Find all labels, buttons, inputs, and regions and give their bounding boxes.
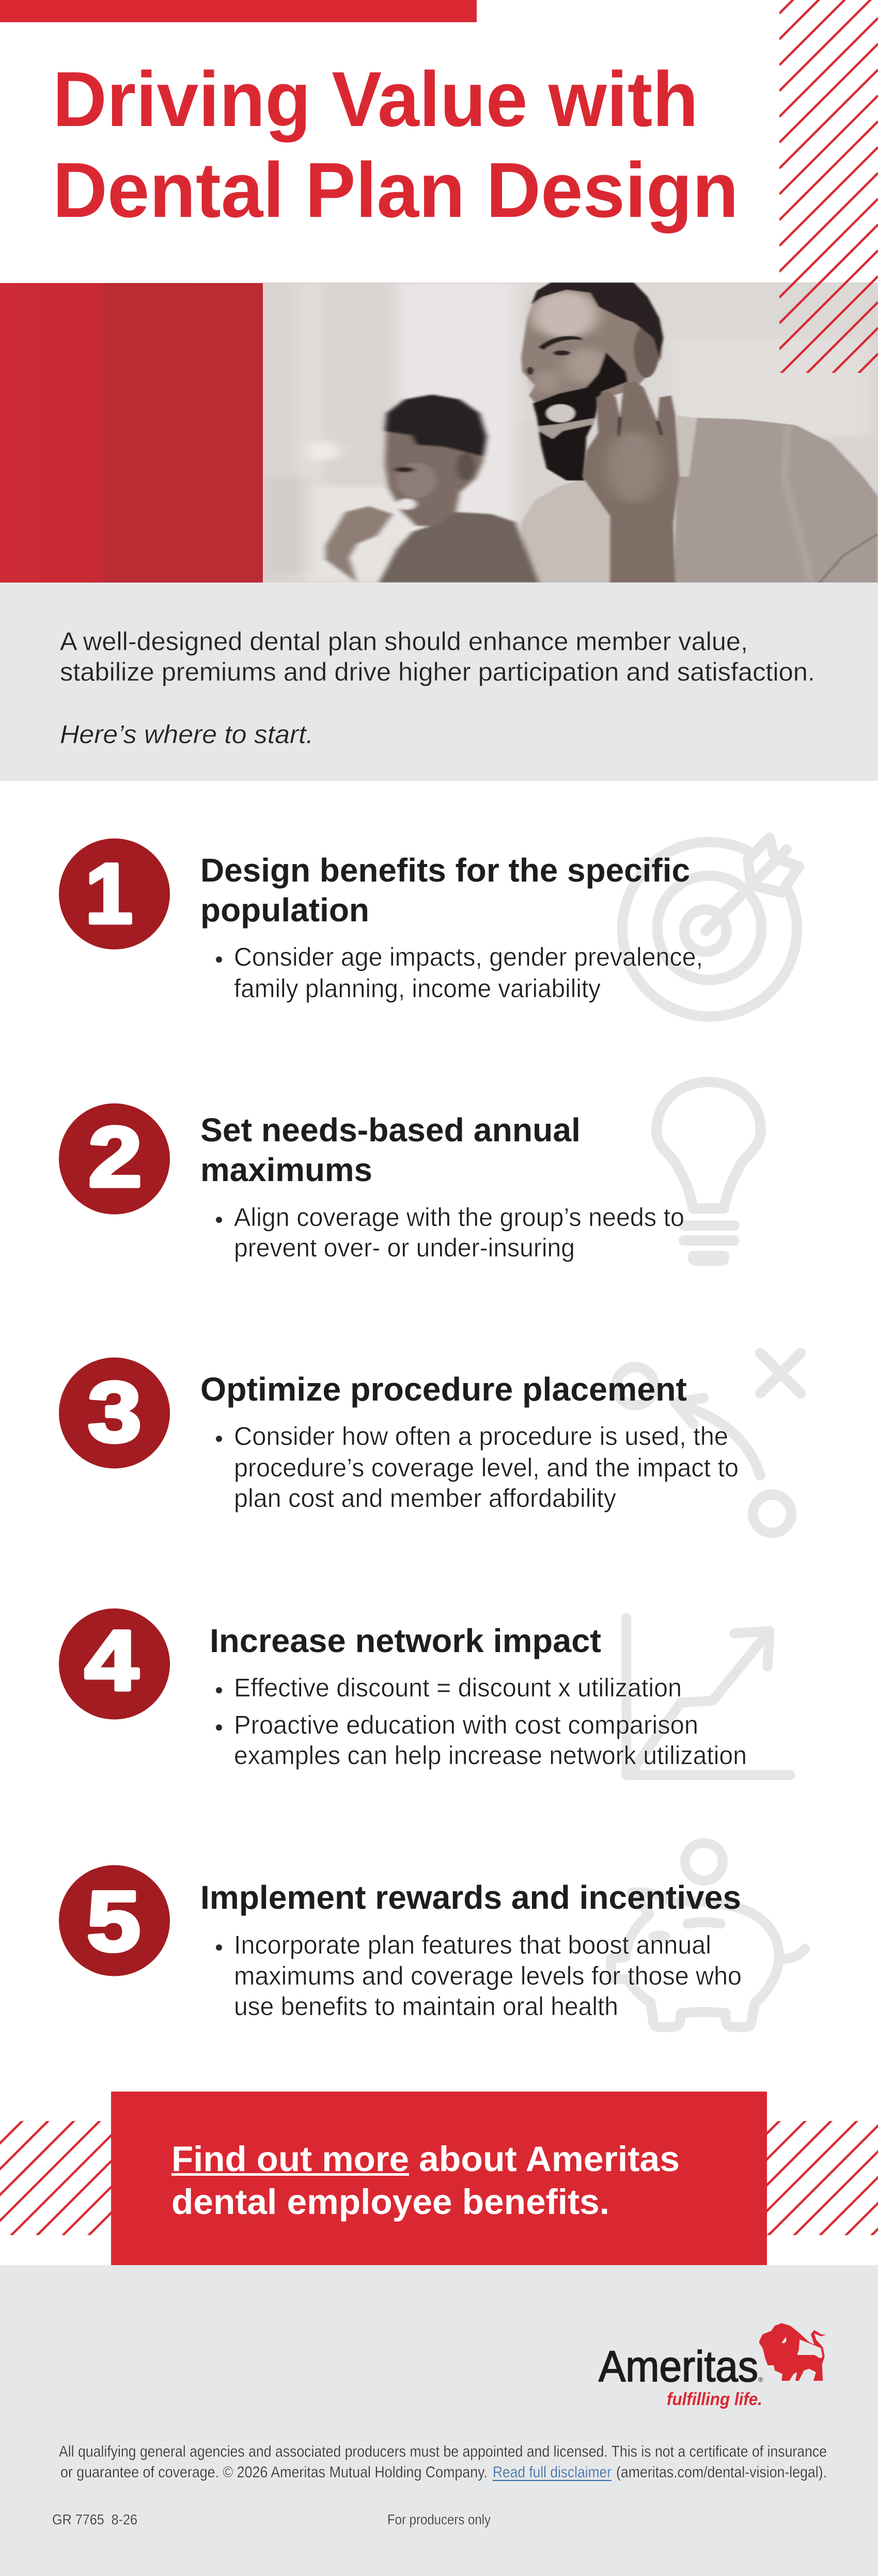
step 3 bullet: Consider how often a procedure is used, the: [234, 1422, 728, 1451]
step 5: [59, 1865, 742, 2021]
title: [53, 55, 739, 233]
step 5 bullet: [216, 1930, 742, 2021]
step 4 bullets: Proactive education with cost comparison: [234, 1710, 698, 1739]
icon: play diagram: [616, 1353, 801, 1533]
left CTA stripes: [0, 2121, 111, 2235]
step 4 bullets: examples can help increase network utilization: [234, 1741, 747, 1770]
number badge 5: 5: [87, 1874, 140, 1969]
number badge 1: [59, 839, 170, 949]
step 1 heading: population: [200, 891, 369, 929]
top red bar: [0, 0, 477, 22]
intro panel: [0, 583, 878, 781]
right CTA stripes: [767, 2121, 878, 2235]
photo: man's shirt: [521, 415, 878, 583]
step 1 bullet: family planning, income variability: [234, 974, 601, 1003]
CTA text: Find out more: [171, 2139, 409, 2179]
number badge 3: 3: [88, 1364, 142, 1459]
title: Dental Plan Design: [53, 146, 739, 233]
number badge 3: [59, 1357, 170, 1469]
step 4: [59, 1608, 747, 1770]
step 3: [59, 1357, 739, 1513]
step 2 heading: maximums: [200, 1151, 372, 1188]
icon: growth chart: [626, 1618, 790, 1775]
icon: piggy bank: [611, 1843, 805, 2027]
step 1 bullet: [216, 943, 703, 1003]
step 5 bullet: use benefits to maintain oral health: [234, 1992, 618, 2021]
step 1: [59, 839, 703, 1003]
step 3 bullet: [216, 1422, 739, 1513]
step 5 bullet: maximums and coverage levels for those who: [234, 1961, 742, 1990]
intro panel: stabilize premiums and drive higher participation and satisfaction.: [60, 657, 815, 686]
icon: bison: [759, 2323, 826, 2381]
step 2 bullet: Align coverage with the group’s needs to: [234, 1203, 684, 1232]
step 3 bullet: plan cost and member affordability: [234, 1484, 616, 1513]
step 1 bullet: Consider age impacts, gender prevalence,: [234, 943, 703, 971]
number badge 2: [59, 1103, 170, 1215]
red panel beside photo: [0, 283, 263, 583]
CTA text: dental employee benefits.: [171, 2182, 609, 2222]
disclaimer: Read full disclaimer: [493, 2463, 612, 2481]
photo: father and son brushing teeth: [258, 279, 878, 589]
step 2 bullet: [216, 1203, 684, 1262]
step 4 bullets: Effective discount = discount x utilization: [234, 1673, 682, 1702]
step 1 heading: [200, 852, 690, 929]
step 3 heading: Optimize procedure placement: [200, 1371, 687, 1408]
step 2: [59, 1103, 684, 1262]
logo tagline: fulfilling life.: [667, 2390, 762, 2409]
number badge 4: [59, 1608, 170, 1720]
step 4 bullets: [216, 1673, 747, 1770]
top-right diagonal stripes: [779, 0, 878, 375]
step 5 bullet: Incorporate plan features that boost annual: [234, 1930, 711, 1959]
photo: man's head: [521, 282, 663, 480]
step 2 heading: Set needs-based annual: [200, 1111, 581, 1149]
step 5 heading: Implement rewards and incentives: [200, 1879, 741, 1916]
step 2 heading: [200, 1111, 581, 1188]
intro panel: Here’s where to start.: [60, 720, 313, 749]
number badge 5: [59, 1865, 170, 1976]
step 1 heading: Design benefits for the specific: [200, 852, 690, 889]
disclaimer: (ameritas.com/dental-vision-legal).: [616, 2463, 827, 2481]
CTA text: about Ameritas: [419, 2139, 680, 2179]
intro text: A well-designed dental plan should enhance member value,: [60, 627, 748, 656]
CTA box: [111, 2092, 767, 2265]
Ameritas logo: [599, 2323, 826, 2409]
step 3 bullet: procedure’s coverage level, and the impact to: [234, 1453, 739, 1482]
producers note: For producers only: [387, 2511, 491, 2527]
number badge 4: 4: [85, 1613, 138, 1708]
number badge 1: 1: [85, 846, 133, 941]
photo: man's hand: [583, 382, 679, 583]
form number: GR 7765 8-26: [52, 2511, 137, 2527]
icon: target with arrow: [622, 838, 799, 1016]
disclaimer: [59, 2443, 827, 2481]
CTA text: [171, 2139, 680, 2222]
footer background: [0, 2265, 878, 2576]
photo: boy: [325, 395, 539, 583]
disclaimer: or guarantee of coverage. © 2026 Ameritas Mutual Holding Company.: [60, 2463, 488, 2481]
registered mark: ®: [758, 2376, 763, 2383]
number badge 2: 2: [88, 1109, 142, 1204]
logo wordmark: Ameritas: [599, 2342, 758, 2391]
step 4 heading: Increase network impact: [210, 1622, 601, 1659]
title: Driving Value with: [53, 55, 698, 143]
icon: light bulb: [656, 1082, 761, 1261]
step 2 bullet: prevent over- or under-insuring: [234, 1233, 575, 1262]
